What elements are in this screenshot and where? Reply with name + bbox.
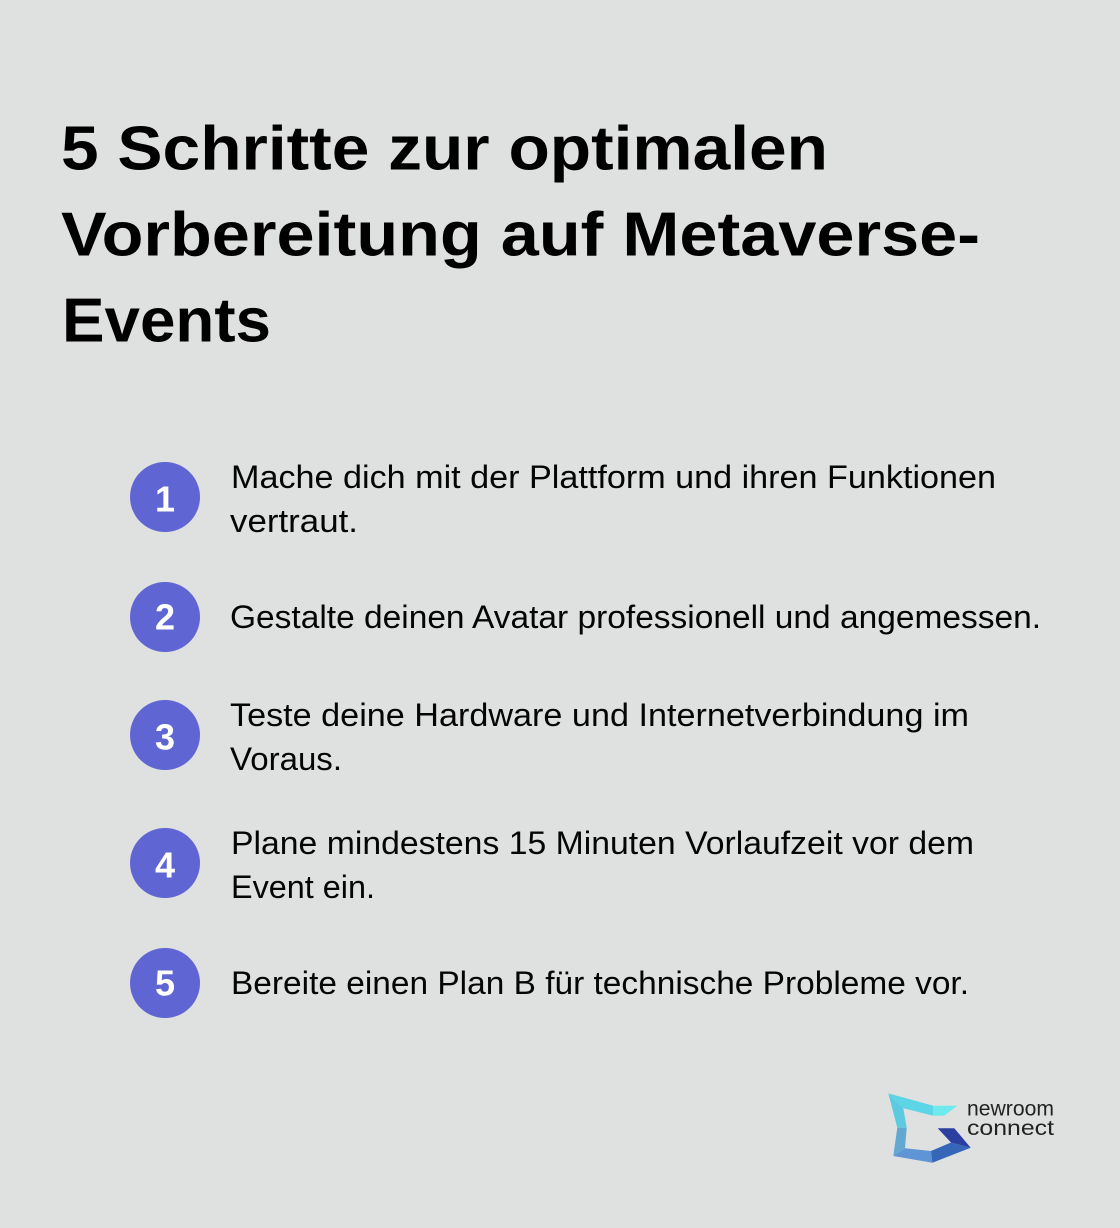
number badge 5 xyxy=(130,948,200,1018)
logo wordmark xyxy=(967,1098,1054,1140)
title xyxy=(61,114,980,356)
logo wordmark: newroom xyxy=(967,1098,1054,1120)
step 2 xyxy=(130,582,1041,652)
title: Vorbereitung auf Metaverse- xyxy=(61,200,980,270)
step 4 xyxy=(130,825,974,905)
step 2 text: Gestalte deinen Avatar professionell und angemessen. xyxy=(230,599,1041,635)
step 4 text: Plane mindestens 15 Minuten Vorlaufzeit vor dem xyxy=(231,825,974,861)
number badge 2 xyxy=(130,582,200,652)
step 5 text: Bereite einen Plan B für technische Probleme vor. xyxy=(231,965,969,1001)
step 3 text: Voraus. xyxy=(230,741,342,777)
logo: newroom connect xyxy=(888,1093,1054,1163)
step 3 xyxy=(130,697,969,777)
logo wordmark: connect xyxy=(967,1117,1054,1140)
step 4 text xyxy=(231,825,974,905)
step 1 text xyxy=(230,459,996,539)
step 3 text xyxy=(230,697,969,777)
number badge 4 xyxy=(130,828,200,898)
number badge 3: 3 xyxy=(155,716,175,758)
number badge 1 xyxy=(130,462,200,532)
number badge 1: 1 xyxy=(155,478,175,520)
step 4 text: Event ein. xyxy=(231,869,375,905)
number badge 3 xyxy=(130,700,200,770)
step 1 text: vertraut. xyxy=(230,503,358,539)
logo mark xyxy=(888,1093,971,1163)
step 3 text: Teste deine Hardware und Internetverbindung im xyxy=(230,697,969,733)
title: 5 Schritte zur optimalen xyxy=(61,114,828,184)
title: Events xyxy=(62,286,271,356)
number badge 4: 4 xyxy=(155,844,175,886)
step 1 xyxy=(130,459,996,539)
step 1 text: Mache dich mit der Plattform und ihren Funktionen xyxy=(231,459,996,495)
number badge 5: 5 xyxy=(155,962,175,1004)
number badge 2: 2 xyxy=(155,596,175,638)
step 5 xyxy=(130,948,969,1018)
